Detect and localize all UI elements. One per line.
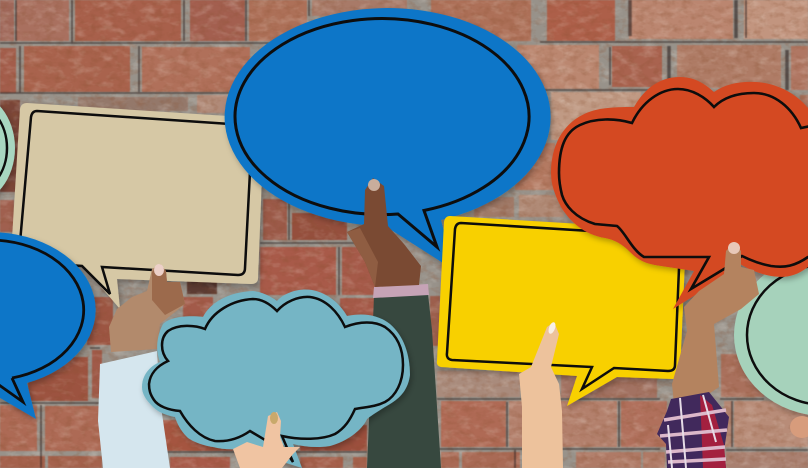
light hand in front of yellow bubble (519, 321, 563, 468)
yellow rectangular speech bubble (437, 216, 686, 406)
dark-skinned hand holding blue bubble (347, 178, 421, 287)
arm: dark green sleeve with checked cuff (367, 284, 441, 468)
hand gripping beige bubble (109, 264, 185, 352)
mint bubble, far left (0, 92, 15, 204)
mint bubble, far right (734, 254, 808, 416)
left blue oval speech bubble (0, 232, 96, 419)
right hand and forearm holding orange bubble (672, 242, 759, 404)
large blue oval speech bubble (225, 8, 551, 270)
arm: white sleeve (98, 351, 170, 468)
beige rectangular speech bubble (11, 103, 264, 309)
orange cloud speech bubble (551, 77, 808, 309)
teal cloud speech bubble (142, 289, 410, 468)
partial fingers at right edge (790, 416, 808, 438)
hand holding teal cloud (233, 412, 300, 468)
plaid shirt cuff (657, 392, 729, 468)
